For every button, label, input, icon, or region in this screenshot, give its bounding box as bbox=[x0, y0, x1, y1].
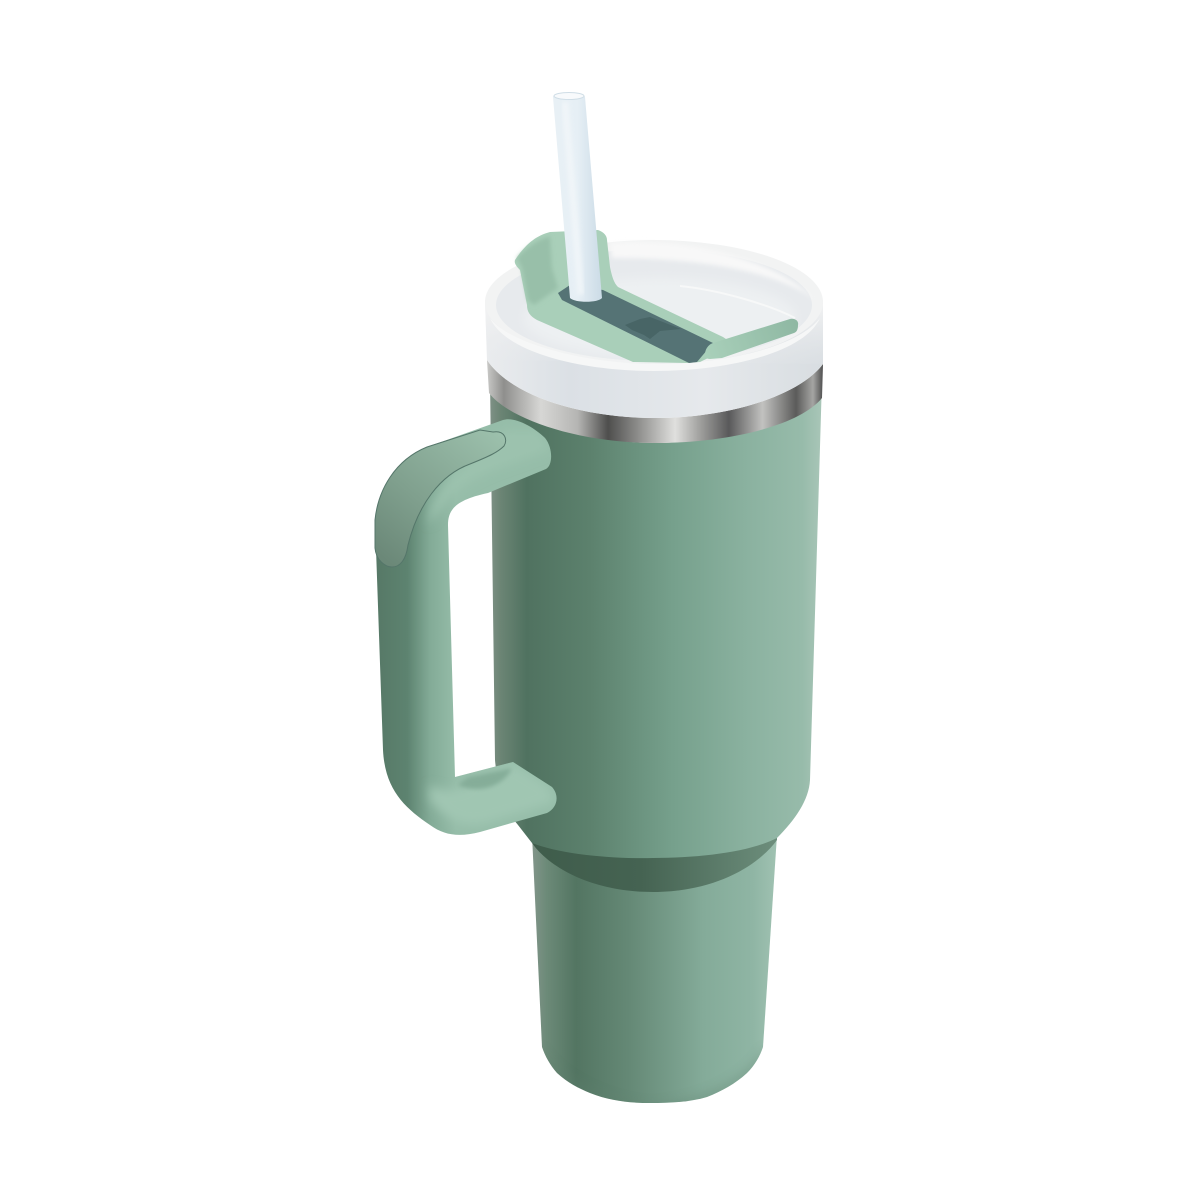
product illustration: tumbler bbox=[374, 92, 823, 1103]
main body with taper bbox=[490, 380, 822, 858]
handle cap panel bbox=[375, 430, 506, 567]
shadow band under taper bbox=[532, 828, 777, 892]
lid back rim highlight bbox=[610, 242, 815, 300]
handle lit top arm bbox=[429, 430, 542, 518]
lid top rim bbox=[485, 240, 823, 364]
icon: bear logo bbox=[625, 317, 681, 339]
lid top fade bbox=[485, 300, 823, 364]
lid front lip bbox=[490, 318, 820, 371]
green slider plate bbox=[515, 230, 735, 363]
lid side bbox=[485, 300, 823, 418]
handle bbox=[375, 419, 557, 835]
right slider tab bbox=[705, 319, 798, 359]
handle lit lower arm bbox=[427, 766, 547, 820]
dark slot with logo bbox=[558, 285, 713, 363]
lower cup section bbox=[532, 835, 777, 1115]
lid inner recess bbox=[496, 249, 812, 361]
steel ring bbox=[487, 360, 823, 443]
straw bbox=[553, 92, 602, 302]
